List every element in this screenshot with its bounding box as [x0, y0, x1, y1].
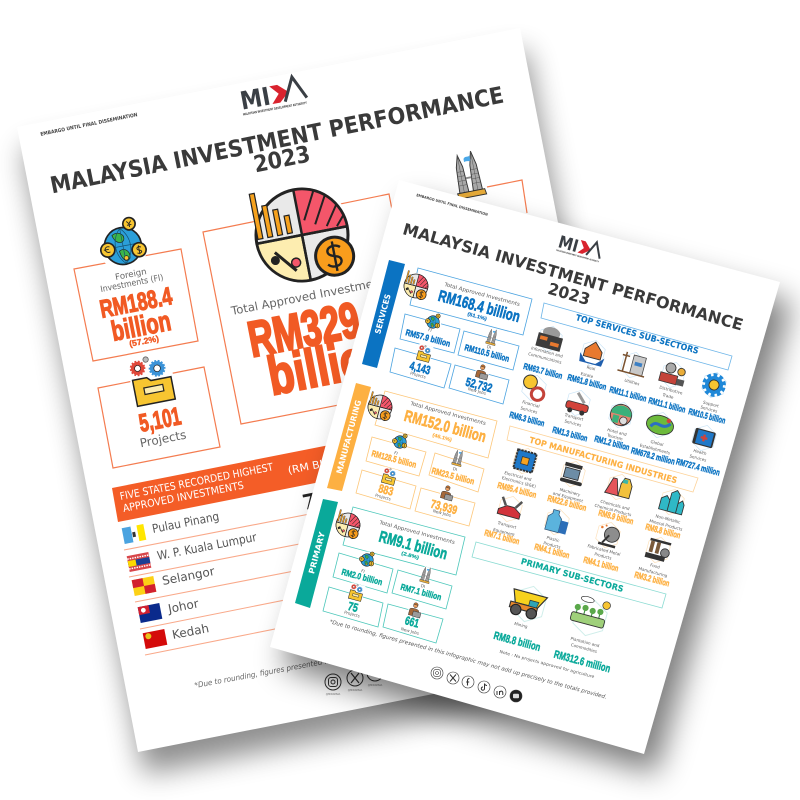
item: plantation and commodities [552, 594, 612, 675]
item: health services: RM727.4 million [675, 456, 721, 478]
logo: MIDA [556, 232, 604, 264]
table: top five states [122, 489, 320, 655]
heading: top manufacturing industries [507, 426, 698, 492]
item: real estate: Estate [580, 371, 594, 379]
item: real estate [566, 338, 608, 392]
title: MALAYSIA INVESTMENT PERFORMANCE [48, 83, 506, 199]
panel: foreign investments: Investments (FI) [100, 273, 164, 295]
item: global establishments: Global [650, 439, 664, 447]
icon: pie chart with coin [243, 176, 361, 294]
item: global establishments: RM678.2 million [630, 445, 676, 467]
panel: total approved investments: RM329.5 [243, 286, 393, 368]
panel: total approved investments: billion [263, 324, 396, 407]
banner: five states: FIVE STATES RECORDED HIGHEST [119, 461, 275, 503]
card: services FI: FI [428, 327, 432, 333]
sector tab: primary [295, 499, 338, 608]
shadow: front sheet [282, 200, 792, 774]
item: information and communications: RM63.7 billion [522, 361, 564, 381]
card: manufacturing total: RM152.0 billion [402, 408, 488, 446]
logo: MIDA: MALAYSIAN INVESTMENT DEVELOPMENT AUTHORITY [243, 101, 308, 117]
heading: top services sub-sectors [541, 303, 732, 370]
state names: W. P. Kuala Lumpur [156, 530, 258, 563]
icon: grinder [597, 523, 621, 549]
item: food manufacturing [633, 535, 672, 588]
panel: foreign investments [74, 215, 198, 361]
card: services total: Total Approved Investments [443, 282, 521, 308]
item: plastic products [533, 507, 571, 560]
flag: Kedah [143, 629, 167, 649]
item: information and communications: Information and [531, 345, 564, 359]
icon: Petronas twin towers [450, 150, 487, 200]
item: non-metallic mineral products [644, 487, 687, 540]
footnote: *Due to rounding, figures presented in this infographic may not add up precisely to the totals provided. [194, 613, 561, 690]
item: financial services: Services [520, 405, 538, 415]
item: distributive trade [647, 360, 688, 415]
item: mining [492, 582, 549, 654]
logo: MIDA [238, 75, 308, 117]
panel: total approved investments [203, 176, 426, 424]
shadow: back sheet [23, 50, 648, 774]
item: support services [687, 370, 728, 426]
item: transport services [551, 388, 592, 443]
item: food manufacturing: RM3.2 billion [633, 570, 671, 588]
note: agriculture: Note : No projects approved for agriculture [499, 649, 595, 679]
flag: Kuala Lumpur [127, 552, 151, 572]
heading: primary sub-sectors: PRIMARY SUB-SECTORS [520, 557, 624, 595]
item: support services: Support [703, 399, 720, 409]
panel: manufacturing [327, 383, 497, 526]
card: manufacturing DI: DI [452, 466, 458, 472]
item: distributive trade: Trade [661, 392, 675, 400]
item: financial services: RM6.3 billion [508, 410, 546, 428]
sector tab: manufacturing: MANUFACTURING [335, 399, 363, 475]
card: primary total: RM9.1 billion [377, 529, 449, 563]
item: chemicals: Chemicals and [600, 499, 631, 511]
item: transport services: RM1.3 billion [551, 425, 589, 443]
icon: robotic arms and car [497, 496, 523, 519]
card: services total [400, 268, 532, 335]
social icons [325, 665, 383, 696]
icon: car and wrench [564, 390, 591, 417]
sector tab: services [362, 260, 405, 368]
icon: house with handshake [578, 339, 608, 367]
card: services jobs: 52,732 [464, 375, 494, 395]
icon: globe with coins [94, 215, 152, 275]
card: primary projects [323, 582, 383, 627]
item: hotel and tourism: RM1.2 billion [593, 434, 631, 452]
item: real estate: RM61.8 billion [566, 372, 608, 392]
icon: server and cloud [535, 324, 565, 352]
card: primary DI: RM7.1 billion [399, 582, 443, 602]
panel: foreign investments: RM188.4 [97, 282, 175, 324]
item: electrical and electronics: Electrical and [504, 470, 532, 482]
heading: top services sub-sectors: TOP SERVICES SUB-SECTORS [574, 313, 700, 357]
icon: mining dump truck [508, 589, 547, 622]
icon: linkedin [494, 686, 506, 698]
card: services FI [400, 311, 460, 353]
card: services projects: Projects [410, 370, 426, 380]
social icons [431, 667, 522, 702]
panel: foreign investments: billion [109, 305, 173, 347]
social icons: @MIDAMSIA [348, 689, 363, 692]
card: manufacturing DI: RM23.5 billion [430, 465, 476, 487]
card: manufacturing projects: 883 [377, 481, 395, 499]
icon: plants in planter [570, 594, 611, 629]
title: 2023 [546, 279, 592, 309]
heading: top manufacturing industries: TOP MANUFACTURING INDUSTRIES [528, 436, 678, 486]
item: hotel and tourism: Tourism [606, 432, 623, 441]
icon: microchip [513, 449, 537, 473]
item: food manufacturing: Manufacturing [638, 566, 668, 578]
item: transport services: Services [564, 418, 582, 428]
item: global establishments: Establishments [639, 443, 671, 455]
card: manufacturing total: (46.1%) [432, 433, 453, 444]
item: support services: RM10.5 billion [687, 406, 727, 426]
card: manufacturing jobs [415, 484, 475, 526]
item: machinery and equipment: RM22.6 billion [546, 493, 588, 513]
card: manufacturing jobs: 73,939 [429, 497, 459, 517]
icon: food machine [645, 537, 672, 563]
item: non-metallic mineral products: Mineral Products [649, 518, 683, 532]
item: distributive trade: Distributive [659, 385, 684, 396]
card: services FI: RM57.9 billion [404, 327, 452, 349]
item: transport services: Transport [563, 412, 584, 422]
item: information and communications: Communications [528, 351, 562, 365]
card: primary jobs: New Jobs [400, 626, 420, 636]
flag: Johor [138, 603, 162, 623]
panel: projects: 5,101 [137, 402, 183, 438]
item: plastic products: Products [543, 540, 561, 550]
footnote: *Due to rounding, figures presented in this infographic may not add up precisely to the totals provided. [329, 619, 607, 701]
card: primary jobs: 661 [403, 613, 421, 631]
item: plantation and commodities: Commodities [570, 642, 598, 654]
banner: five states: (RM BILLION) [287, 451, 360, 477]
icon: machine [560, 461, 586, 487]
item: plantation and commodities: Plantation and [570, 636, 600, 648]
item: machinery and equipment [546, 459, 588, 513]
panel: foreign investments: (57.2%) [128, 333, 160, 349]
sector tab: services: SERVICES [373, 293, 393, 335]
item: electrical and electronics [496, 446, 539, 500]
item: plantation and commodities: RM312.6 million [552, 649, 612, 675]
item: health services: Health [693, 448, 708, 456]
item: utilities: RM11.1 billion [608, 384, 648, 404]
sector tab: manufacturing [327, 383, 371, 491]
panel: foreign investments: Foreign [114, 267, 148, 283]
item: mining: Mining [514, 621, 529, 629]
icon: instagram [431, 667, 443, 679]
item: fabricated metal products: Products [594, 551, 612, 561]
item: transport equipment: RM7.1 billion [483, 528, 521, 546]
icon: utility building [617, 351, 649, 377]
embargo note: EMBARGO UNTIL FINAL DISSEMINATION [416, 193, 488, 217]
card: manufacturing FI [366, 431, 426, 476]
panel: projects [98, 351, 220, 468]
embargo note: EMBARGO UNTIL FINAL DISSEMINATION [40, 112, 138, 138]
item: health services [675, 423, 721, 478]
icon: gear and wrench [702, 373, 726, 397]
icon: hotel [608, 402, 634, 428]
card: primary total [332, 507, 465, 575]
item: food manufacturing: Food [650, 562, 661, 570]
panel: primary [295, 499, 465, 643]
card: primary FI: FI [361, 568, 365, 574]
card: manufacturing jobs: New Jobs [432, 508, 452, 518]
icon: flasks [605, 474, 634, 499]
title: MALAYSIA INVESTMENT PERFORMANCE [401, 220, 745, 334]
item: utilities: Utilities [624, 378, 640, 386]
card: primary projects: 75 [346, 599, 360, 615]
item: electrical and electronics: Electronics (E&E) [501, 475, 537, 489]
big value fragment: 7 [300, 489, 319, 515]
card: services jobs: New Jobs [467, 386, 487, 396]
panel: services [362, 260, 532, 404]
icon: facebook [462, 676, 474, 688]
panel: front sheet, sector breakdown [270, 180, 780, 754]
icon: X [447, 672, 459, 684]
card: manufacturing FI: FI [394, 450, 398, 456]
icon: plastic bottles [545, 509, 571, 535]
state names: Pulau Pinang [151, 509, 220, 536]
item: transport equipment: Transport [496, 520, 517, 530]
item: support services: Services [700, 404, 718, 414]
item: transport equipment [483, 494, 524, 546]
item: machinery and equipment: and Equipment [552, 491, 584, 504]
item: non-metallic mineral products: Non-Metallic [655, 513, 681, 525]
flag: Pulau Pinang [122, 524, 146, 544]
item: machinery and equipment: Machinery [559, 487, 581, 497]
item: plastic products: Plastic [546, 535, 560, 543]
card: manufacturing DI [429, 449, 484, 492]
logo: MIDA: MI [556, 232, 580, 257]
item: transport equipment: Equipment [493, 527, 516, 537]
item: electrical and electronics: RM85.4 billion [496, 480, 538, 500]
item: distributive trade: RM11.1 billion [647, 395, 687, 415]
item: fabricated metal products: Fabricated Metal [587, 543, 621, 557]
card: manufacturing projects: Projects [375, 492, 391, 502]
card: manufacturing total [364, 391, 497, 458]
banner: five states: APPROVED INVESTMENTS [122, 480, 245, 515]
icon: map route [644, 412, 676, 438]
logo: MIDA: MI [238, 82, 273, 116]
item: fabricated metal products [582, 520, 622, 573]
item: utilities [608, 350, 649, 404]
card: primary jobs [383, 601, 443, 643]
state names [151, 509, 258, 642]
flag: Selangor [132, 576, 156, 596]
item: chemicals: Chemical Products [594, 503, 632, 517]
card: primary total: (2.8%) [401, 551, 420, 561]
icon: folder with gears [126, 351, 178, 410]
item: non-metallic mineral products: RM8.8 billion [644, 522, 682, 540]
card: primary DI [392, 566, 452, 609]
panel: back sheet, state-level infographic [17, 28, 642, 752]
item: health services: Services [689, 453, 707, 463]
card: manufacturing projects [356, 466, 416, 509]
item: chemicals: RM8.9 billion [597, 508, 635, 526]
sector tab: primary: PRIMARY [307, 531, 327, 575]
panel: twin towers box [450, 150, 527, 213]
card: manufacturing FI: RM128.5 billion [370, 448, 418, 470]
item: plastic products: RM4.1 billion [533, 542, 571, 560]
heading: primary sub-sectors [472, 542, 666, 608]
item: hotel and tourism [593, 400, 635, 452]
icon: youtube [510, 690, 522, 702]
card: services jobs [449, 363, 509, 404]
item: mining: RM8.8 billion [492, 630, 542, 654]
icon: medical tablet [692, 428, 716, 448]
card: services projects: 4,143 [408, 359, 432, 378]
state names: Kedah [171, 621, 210, 642]
banner: five states [112, 431, 406, 522]
card: services projects [390, 343, 451, 388]
card: primary DI: DI [420, 583, 426, 589]
item: chemicals [594, 472, 635, 526]
state names: Johor [166, 596, 200, 616]
icon: truck and gears [659, 361, 688, 387]
card: services DI: RM110.5 billion [463, 342, 511, 364]
item: financial services [508, 373, 548, 428]
panel: total approved investments: Total Approved Investments [229, 273, 392, 318]
card: services DI: DI [486, 344, 492, 350]
state names: Selangor [161, 564, 216, 588]
social icons: @MIDAMSIA [326, 693, 341, 696]
item: financial services: Financial [522, 399, 540, 409]
card: primary FI: RM2.0 billion [340, 567, 384, 587]
item: real estate: Real [586, 364, 596, 372]
card: services total: (51.1%) [467, 312, 488, 323]
logo: MIDA: MALAYSIAN INVESTMENT DEVELOPMENT AUTHORITY [556, 249, 599, 264]
item: fabricated metal products: RM4.1 billion [582, 555, 620, 573]
card: manufacturing total: Total Approved Investments [409, 401, 487, 427]
item: hotel and tourism: Hotel and [607, 427, 628, 437]
card: primary projects: Projects [344, 609, 360, 619]
card: services DI [458, 328, 519, 370]
panel: projects: Projects [139, 428, 187, 450]
item: information and communications [522, 324, 565, 381]
icon: coin and gear [520, 373, 548, 402]
social icons: @MIDAMSIA [368, 684, 383, 687]
card: primary FI [333, 549, 393, 593]
item: global establishments [630, 410, 676, 467]
card: services total: RM168.4 billion [436, 288, 522, 326]
card: primary total: Total Approved Investments [378, 520, 456, 546]
icon: crystals [659, 487, 687, 515]
icon: tiktok [478, 681, 490, 693]
title: 2023 [251, 142, 313, 178]
